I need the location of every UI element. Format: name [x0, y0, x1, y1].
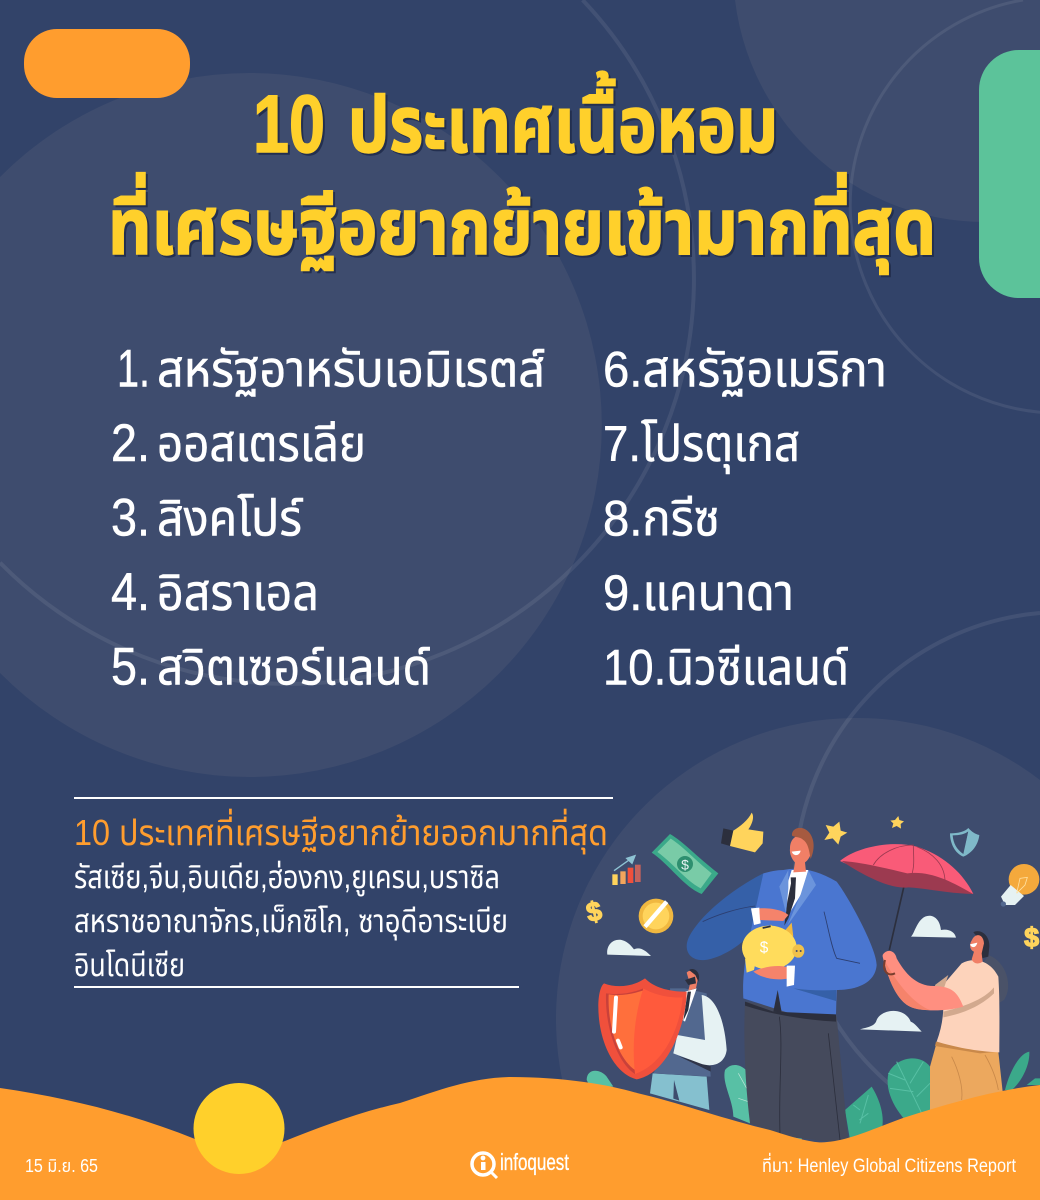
footer: infoquest logo: infoquest [500, 1149, 569, 1175]
text block: countries the wealthy leave: สหราชอาณาจักร,เม็กซิโก, ซาอุดีอาระเบีย [74, 903, 508, 940]
icon: coin and dollar signs: $ [1024, 923, 1039, 953]
list: left column, top 5: ออสเตรเลีย [157, 416, 366, 472]
title [108, 71, 938, 276]
decorative green pill [979, 50, 1040, 298]
text block: countries the wealthy leave: อินโดนีเซีย [74, 947, 185, 983]
list: right column, 6 to 10: 10.นิวซีแลนด์ [603, 640, 849, 696]
text block: countries the wealthy leave [74, 797, 613, 988]
icon: shield badge [950, 828, 979, 857]
list: left column, top 5: อิสราเอล [157, 565, 319, 621]
title: ประเทศเนื้อหอม [348, 71, 778, 169]
list: left column, top 5: 4. [111, 563, 150, 622]
icon: dollar bill: $ [681, 856, 689, 872]
icon: woman with umbrella [840, 844, 1008, 1113]
list: left column, top 5: สหรัฐอาหรับเอมิเรตส์ [157, 342, 545, 398]
icon: coin and dollar signs: $ [584, 895, 605, 928]
list: left column, top 5: 1. [117, 340, 150, 398]
icon: growth chart [612, 856, 641, 885]
icon: coin and dollar signs [584, 895, 1039, 953]
icon: piggy bank [742, 923, 804, 973]
icon: thumbs up [721, 813, 763, 852]
text block: countries the wealthy leave: รัสเซีย,จีน,อินเดีย,ฮ่องกง,ยูเครน,บราซิล [74, 859, 500, 897]
icon: man with shield [598, 969, 727, 1110]
list: right column, 6 to 10: 7.โปรตุเกส [603, 416, 800, 474]
icon: main man with piggy bank [687, 828, 877, 1143]
footer: infoquest logo [472, 1149, 569, 1178]
icon: dollar bill [652, 834, 718, 894]
list: left column, top 5: 2. [111, 414, 150, 473]
list: left column, top 5: สิงคโปร์ [157, 490, 303, 546]
list: right column, 6 to 10: 6.สหรัฐอเมริกา [603, 342, 887, 398]
list: left column, top 5: 3. [111, 488, 150, 548]
title: ที่เศรษฐีอยากย้ายเข้ามากที่สุด [108, 173, 936, 274]
icon: leaves [587, 1052, 1040, 1140]
icon: clouds [607, 916, 956, 1032]
illustration: people protecting wealth [584, 813, 1040, 1143]
icon: stars [824, 816, 904, 845]
icon: light bulb [1001, 864, 1039, 907]
list: left column, top 5: 5. [111, 638, 150, 696]
list: right column, 6 to 10: 8.กรีซ [603, 490, 720, 546]
title: 10 [255, 81, 327, 172]
decorative orange pill [24, 29, 190, 98]
text block: countries the wealthy leave: 10 ประเทศที่เศรษฐีอยากย้ายออกมากที่สุด [74, 808, 608, 854]
list: left column, top 5: สวิตเซอร์แลนด์ [157, 640, 431, 696]
title: 10 [253, 79, 325, 170]
title: ที่เศรษฐีอยากย้ายเข้ามากที่สุด [110, 175, 938, 276]
icon: piggy bank: $ [760, 939, 769, 956]
footer: date: 15 มิ.ย. 65 [25, 1156, 98, 1176]
list: right column, 6 to 10: 9.แคนาดา [603, 565, 794, 621]
list: right column, 6 to 10 [603, 342, 887, 696]
title: ประเทศเนื้อหอม [350, 73, 780, 171]
decorative yellow circle [194, 1083, 284, 1174]
footer: orange wave [0, 1077, 1040, 1200]
list: left column, top 5 [111, 340, 545, 696]
